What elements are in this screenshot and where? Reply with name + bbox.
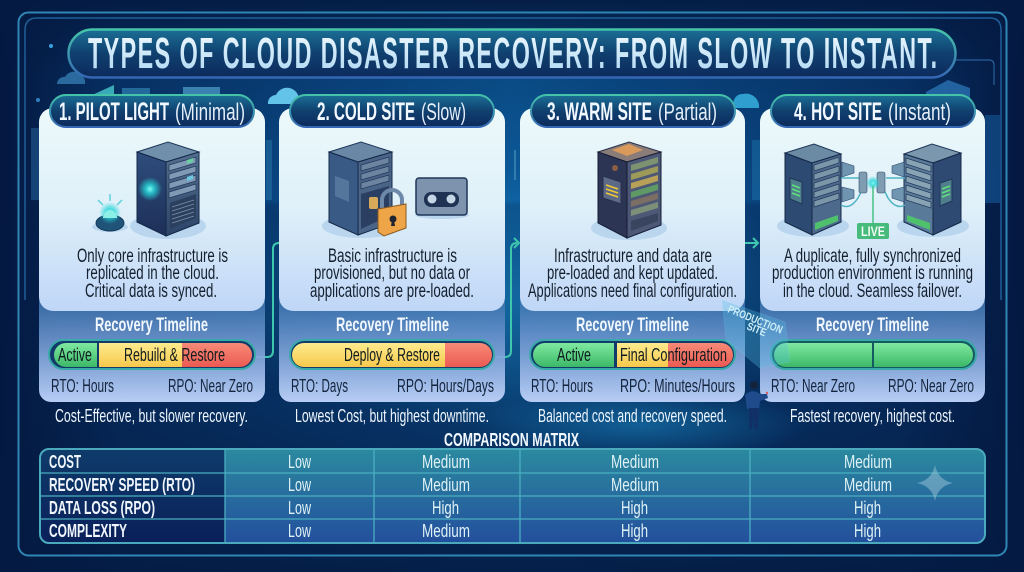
icon: primary server [777, 144, 849, 237]
summary: Cost-Effective, but slower recovery. [55, 405, 248, 426]
RPO: RPO: Minutes/Hours [620, 376, 735, 396]
title text: TYPES OF CLOUD DISASTER RECOVERY: FROM SLOW TO INSTANT. [88, 29, 937, 78]
row: recovery speed: Medium [422, 474, 470, 495]
RTO: RTO: Hours [51, 376, 114, 396]
description [528, 246, 737, 302]
comparison matrix [40, 429, 985, 543]
card upper panel [39, 108, 265, 311]
description: Infrastructure and data are [554, 246, 712, 267]
card upper panel [760, 108, 985, 311]
icon: padlock [378, 190, 406, 236]
timeline bar [530, 340, 735, 369]
heading pill: (Minimal) [175, 99, 245, 126]
heading pill: (Instant) [888, 99, 951, 126]
timeline bar: Final Configuration [620, 344, 727, 365]
matrix title: COMPARISON MATRIX [444, 429, 579, 450]
icon: secondary server [897, 144, 969, 237]
icon: warm server rack [591, 142, 667, 240]
card lower panel [279, 290, 505, 402]
timeline heading: Recovery Timeline [576, 314, 689, 336]
icon: backup tape [415, 178, 469, 219]
arrow: warm site to hot site [745, 238, 758, 248]
heading pill: 2. COLD SITE [317, 98, 415, 126]
description: Critical data is synced. [85, 281, 217, 302]
RPO: RPO: Near Zero [168, 376, 253, 396]
card upper panel [520, 108, 745, 311]
row: recovery speed: Low [288, 474, 311, 495]
description [772, 246, 973, 302]
heading pill [771, 95, 975, 127]
row: recovery speed: Medium [611, 474, 659, 495]
description: Basic infrastructure is [328, 246, 457, 267]
row: data loss: High [854, 497, 881, 518]
timeline bar: Active [58, 344, 92, 365]
description [77, 246, 228, 302]
description: applications are pre-loaded. [310, 281, 474, 302]
RPO: RPO: Near Zero [888, 376, 974, 396]
arrow: cold site to warm site [495, 238, 519, 357]
description: provisioned, but no data or [314, 263, 470, 284]
title banner [68, 29, 956, 78]
row: data loss: Low [288, 497, 311, 518]
panel: cold site [279, 95, 505, 426]
row: cost: Medium [844, 451, 892, 472]
card lower panel [39, 290, 265, 402]
row: data loss [49, 497, 881, 518]
background decoration: clouds and network icons [31, 44, 1000, 203]
heading pill: (Slow) [421, 99, 466, 126]
icon: sparkle [917, 465, 953, 501]
description: pre-loaded and kept updated. [547, 263, 718, 284]
timeline bar [771, 340, 976, 369]
row: data loss: High [432, 497, 459, 518]
timeline heading: Recovery Timeline [816, 314, 929, 336]
timeline heading: Recovery Timeline [95, 314, 208, 336]
hologram: production site [722, 300, 790, 368]
card lower panel [520, 290, 745, 402]
icon: pilot light lamp [92, 194, 128, 232]
timeline bar: Deploy & Restore [344, 344, 440, 365]
row: complexity: High [854, 520, 881, 541]
hologram: production site: SITE [745, 321, 768, 339]
panel: warm site [520, 95, 745, 426]
panel: hot site [760, 95, 985, 426]
row: recovery speed: RECOVERY SPEED (RTO) [49, 474, 195, 495]
row: cost: Low [288, 451, 311, 472]
row: complexity: COMPLEXITY [49, 520, 127, 541]
hologram: production site: PRODUCTION [726, 304, 784, 337]
timeline bar [49, 340, 255, 369]
heading pill: (Partial) [658, 99, 717, 126]
panel: pilot light [39, 95, 265, 426]
icon: sync link [841, 162, 905, 224]
row: cost: COST [49, 451, 81, 472]
RTO: RTO: Near Zero [771, 376, 855, 396]
icon: server rack [130, 142, 206, 239]
timeline heading: Recovery Timeline [336, 314, 449, 336]
row: recovery speed [49, 474, 892, 495]
description [310, 246, 474, 302]
card upper panel [279, 108, 505, 311]
person figure [745, 381, 768, 429]
row: complexity [49, 520, 881, 541]
timeline bar: Rebuild & Restore [124, 344, 225, 365]
summary: Balanced cost and recovery speed. [538, 405, 727, 426]
row: cost [49, 451, 892, 472]
row: data loss: DATA LOSS (RPO) [49, 497, 155, 518]
heading pill: 3. WARM SITE [547, 98, 652, 126]
description: replicated in the cloud. [86, 263, 219, 284]
heading pill: 4. HOT SITE [794, 98, 882, 126]
summary: Lowest Cost, but highest downtime. [295, 405, 489, 426]
row: recovery speed: Medium [844, 474, 892, 495]
row: data loss: High [621, 497, 648, 518]
row: complexity: Medium [422, 520, 470, 541]
row: cost: Medium [611, 451, 659, 472]
row: cost: Medium [422, 451, 470, 472]
RTO: RTO: Hours [531, 376, 593, 396]
timeline bar: Active [557, 344, 591, 365]
timeline bar [290, 340, 494, 369]
row: complexity: High [621, 520, 648, 541]
card lower panel [760, 290, 985, 402]
heading pill: 1. PILOT LIGHT [59, 98, 169, 126]
description: Only core infrastructure is [77, 246, 228, 267]
description: Applications need final configuration. [528, 281, 737, 302]
arrow: pilot light to cold site [256, 243, 279, 357]
RPO: RPO: Hours/Days [397, 376, 494, 396]
RTO: RTO: Days [291, 376, 348, 396]
heading pill [290, 95, 494, 127]
row: complexity: Low [288, 520, 311, 541]
live badge: LIVE [861, 223, 885, 239]
table body [40, 449, 985, 543]
icon: server with lock [322, 142, 402, 238]
